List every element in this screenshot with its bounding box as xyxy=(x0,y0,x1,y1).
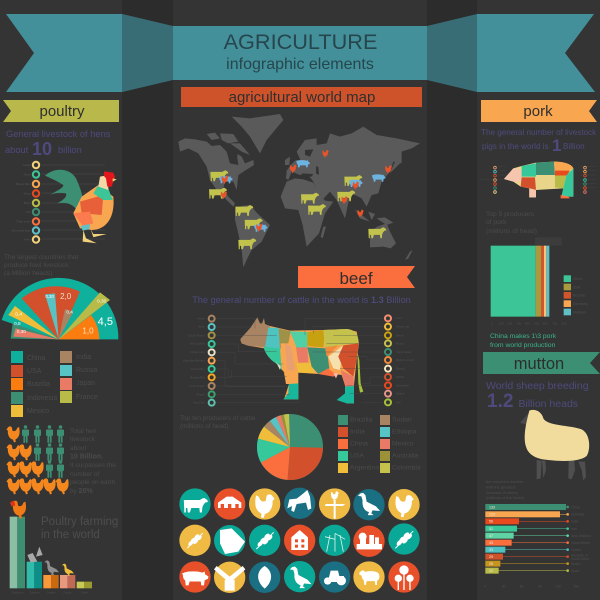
text: pigs number: Billion xyxy=(563,142,585,151)
text: China pork: from world production xyxy=(490,342,556,349)
cow cut diagram: Sirloin xyxy=(396,333,405,337)
text: countries sheep: the countries leaders xyxy=(486,479,523,484)
pork stacked chart: Brazilia xyxy=(573,294,586,298)
text: China pork xyxy=(490,333,557,349)
text: sheep breeding: 1.2 xyxy=(487,391,513,412)
cow cut diagram: Round xyxy=(396,367,405,371)
fan chart: 0,30 xyxy=(97,299,107,304)
heading: mutton xyxy=(483,352,600,374)
cow cut diagram: Hind Tail xyxy=(193,401,205,405)
heading: mutton: mutton xyxy=(514,355,564,373)
mutton bar chart: 29 xyxy=(489,555,493,559)
heading: pork xyxy=(481,100,597,122)
fan chart: 2,0 xyxy=(60,292,72,301)
text: largest countries xyxy=(4,254,79,277)
fan legend: USA xyxy=(27,368,42,375)
pork stacked chart: 600 xyxy=(543,322,548,326)
cow cut diagram: Head xyxy=(198,316,205,320)
fan legend: Brazilia xyxy=(27,381,50,388)
fan legend: China xyxy=(27,355,45,362)
mutton bar chart: 133 xyxy=(489,505,495,509)
fan chart: 0,4 xyxy=(15,312,22,318)
mutton bar chart: Turkey xyxy=(571,548,581,552)
heading: agricultural world map: agricultural world map xyxy=(229,89,375,106)
mutton bar chart: 47 xyxy=(489,534,493,538)
text: total hen livestock: number of xyxy=(70,471,99,478)
fan legend: Russia xyxy=(76,367,98,374)
fan legend: Indonesia xyxy=(27,395,57,402)
text: countries sheep: (millions of the flocks) xyxy=(486,495,525,500)
title ribbon: infographic elements xyxy=(226,56,374,73)
pictogram hens and people xyxy=(6,425,69,494)
mutton bar chart: India xyxy=(571,520,578,524)
heading: pork: pork xyxy=(523,103,553,120)
text: cattle number: The general number of cattle in the world is 1.3 Billion xyxy=(192,295,411,305)
text: poultry farming: Poultry farming xyxy=(41,516,118,528)
cow cut diagram: Rib Cutlets xyxy=(190,342,205,346)
text: hens livestock: about xyxy=(5,145,29,155)
pork stacked chart: 400 xyxy=(525,322,530,326)
cow cut diagram: Rump xyxy=(396,341,404,345)
text: pigs number: pigs in the world is xyxy=(482,142,549,151)
pork stacked chart: Vietnam xyxy=(573,310,586,314)
poultry bar chart: Ducks xyxy=(64,590,72,594)
text: total hen livestock: It surpasses the xyxy=(70,462,116,469)
fan legend: Mexico xyxy=(27,408,49,415)
mutton bar chart: 0 xyxy=(484,584,486,588)
tiny labels: Head xyxy=(23,163,30,167)
poultry bar chart: Other xyxy=(81,590,88,594)
mutton bar chart: 56 xyxy=(489,520,493,524)
mutton bar chart: 60 xyxy=(520,584,524,588)
text: top ten cattle: Top ten producers of cattle xyxy=(180,415,256,422)
mutton bar chart: Australia xyxy=(571,513,584,517)
mutton bar chart: Iran xyxy=(571,527,577,531)
mutton bar chart: 120 xyxy=(555,584,561,588)
cow cut diagram: Neck xyxy=(198,325,205,329)
tiny labels: Back xyxy=(24,201,31,205)
text: top ten cattle xyxy=(180,415,256,430)
cow cut diagram: Ridge Loin xyxy=(190,350,205,354)
cow cut diagram: Shank xyxy=(196,392,205,396)
tiny labels: Feet xyxy=(24,238,30,242)
pork stacked chart: 100 xyxy=(499,322,504,326)
mutton bar chart: China xyxy=(571,505,580,509)
cow cut diagram: Tail xyxy=(396,400,401,404)
pork stacked chart: 0 xyxy=(491,322,493,326)
text: total hen livestock: about xyxy=(70,445,86,452)
heading: poultry xyxy=(3,100,119,122)
text: pigs number: The general number of livestock xyxy=(481,128,597,137)
cow cut diagram: Shank xyxy=(396,392,405,396)
text: total hen livestock: people on earth xyxy=(70,479,116,486)
text: top ten cattle: (millions of head) xyxy=(180,423,229,430)
fan legend xyxy=(11,351,98,417)
pie legend: Sudan xyxy=(392,416,412,424)
text: top 5 pork: of pork xyxy=(486,219,507,226)
text: sheep breeding: Billion heads xyxy=(518,398,578,410)
mutton bar chart xyxy=(484,504,591,588)
mutton bar chart: 25 xyxy=(489,562,493,566)
text: poultry farming xyxy=(41,516,118,541)
text: top 5 pork: Top 5 producers xyxy=(486,211,535,218)
cow cut diagram: Shoulder Brisket xyxy=(183,358,205,362)
pie legend: China xyxy=(350,440,368,448)
mutton bar chart: 30 xyxy=(502,584,506,588)
panel: pork xyxy=(480,100,597,349)
pork stacked chart xyxy=(491,237,588,326)
poultry bar chart: Chickens xyxy=(11,590,24,594)
text: total hen livestock xyxy=(70,428,116,495)
mutton bar chart: Spain xyxy=(571,569,580,573)
pork stacked chart: 500 xyxy=(534,322,539,326)
heading: beef: beef xyxy=(339,269,373,288)
text: top 5 pork xyxy=(486,211,537,235)
mutton bar chart: 52 xyxy=(489,527,493,531)
title ribbon xyxy=(6,14,595,92)
text: top 5 pork: (millions of head) xyxy=(486,228,537,235)
text: sheep breeding xyxy=(486,380,589,412)
sheep illustration xyxy=(520,410,589,481)
text: sheep breeding: World sheep breeding xyxy=(486,380,589,392)
pie chart xyxy=(274,430,306,464)
text: countries sheep xyxy=(486,479,525,500)
text: hens livestock: 10 xyxy=(32,139,52,159)
mutton bar chart: 150 xyxy=(573,584,579,588)
tiny labels: Drumstick legs xyxy=(12,228,31,232)
panel: beef xyxy=(180,266,421,473)
fan chart: 0,30 xyxy=(17,329,26,334)
text: largest countries: (a Million heads) xyxy=(4,270,52,277)
text: largest countries: produce fowl livestock xyxy=(4,262,69,269)
pie legend: Ethiopia xyxy=(392,428,417,436)
pork stacked chart: China xyxy=(573,277,583,281)
text: countries sheep: livestock of sheep xyxy=(486,490,519,495)
mutton bar chart: 22 xyxy=(489,569,493,573)
tiny labels: Breast fillet xyxy=(16,182,30,186)
cow cut diagram: Fore Shank xyxy=(189,384,205,388)
text: poultry farming: in the world xyxy=(41,529,100,541)
poultry bar chart: Turkeys xyxy=(29,590,40,594)
text: countries sheep: with the greatest xyxy=(486,484,516,490)
fan chart: 0,8 xyxy=(14,321,21,326)
pork stacked chart: USA xyxy=(573,285,581,289)
pie legend: Brazilia xyxy=(350,416,373,424)
cow cut diagram xyxy=(183,315,414,406)
panel: mutton xyxy=(483,352,600,588)
title ribbon: AGRICULTURE xyxy=(224,29,377,54)
cow cut diagram: Loin xyxy=(396,316,402,320)
text: total hen livestock: 10 Billion. xyxy=(70,454,103,460)
pie legend: Colombia xyxy=(392,464,421,472)
icon grid xyxy=(179,488,420,593)
mutton bar chart: 33 xyxy=(489,548,493,552)
fan legend: France xyxy=(76,394,98,401)
pork stacked chart: 200 xyxy=(507,322,512,326)
heading: agricultural world map xyxy=(181,87,422,107)
fan chart: 0,30 xyxy=(45,294,54,299)
rooster illustration xyxy=(45,170,117,243)
rooster rings xyxy=(33,162,105,243)
text: China pork: China makes 1\3 pork xyxy=(490,333,557,340)
pork stacked chart: 700 xyxy=(552,322,557,326)
fan chart xyxy=(2,278,118,339)
tiny labels: Wing xyxy=(24,192,30,196)
mutton bar chart: Republic of xyxy=(571,554,588,558)
mutton bar chart: 123 xyxy=(489,513,495,517)
tiny labels: Neck xyxy=(24,172,31,176)
heading: beef xyxy=(298,266,415,288)
mutton bar chart: Sudan xyxy=(571,562,581,566)
text: pigs number: 1 xyxy=(552,136,561,155)
mutton bar chart: New Zealand xyxy=(571,534,591,538)
mutton bar chart: 90 xyxy=(538,584,542,588)
text: total hen livestock: livestock xyxy=(70,436,96,443)
cow cut diagram: Chuck Roast xyxy=(188,333,205,337)
pork stacked chart: 300 xyxy=(516,322,521,326)
pie legend: India xyxy=(350,428,365,436)
pig cut diagram xyxy=(480,162,597,198)
cow cut diagram: Udder xyxy=(396,375,404,379)
mutton bar chart: Great Britain xyxy=(571,541,590,545)
pie legend: Mexico xyxy=(392,440,414,448)
cow cut diagram: Brisket Rib xyxy=(190,375,205,379)
mutton bar chart: South Africa xyxy=(571,557,589,561)
cow cut diagram: Bottom round xyxy=(396,358,414,362)
cow cut diagram: Silverside xyxy=(396,383,409,387)
text: largest countries: The largest countries that xyxy=(4,254,79,261)
pork stacked chart: 800 xyxy=(561,322,567,326)
fan chart: 0,4 xyxy=(66,309,73,314)
world map xyxy=(178,114,420,267)
poultry bar chart xyxy=(10,500,92,594)
fan legend: India xyxy=(76,354,91,361)
text: hens livestock: General livestock of hens xyxy=(6,129,111,139)
heading: poultry: poultry xyxy=(39,103,85,120)
pork stacked chart: Germany xyxy=(573,302,588,306)
fan legend: Japan xyxy=(76,380,95,387)
tiny labels: Tail xyxy=(26,210,30,214)
text: hens livestock: billion xyxy=(58,145,82,155)
cow cut diagram: Sirloin top xyxy=(396,325,410,329)
cow cut diagram: Flank steak xyxy=(396,350,412,354)
fan chart: 4,5 xyxy=(98,316,113,328)
text: total hen livestock: by 20% xyxy=(70,488,93,495)
mutton bar chart: 43 xyxy=(489,541,493,545)
text: hens livestock xyxy=(5,129,111,159)
pie legend xyxy=(338,415,421,473)
pie legend: USA xyxy=(350,452,364,460)
tiny labels xyxy=(12,163,31,242)
fan chart: 1,0 xyxy=(82,327,94,336)
tiny labels: Thigh meat xyxy=(16,220,30,224)
panel: poultry xyxy=(2,100,119,594)
pie legend: Argentina xyxy=(350,464,379,472)
text: pigs number xyxy=(481,128,597,155)
text: total hen livestock: Total hen xyxy=(70,428,97,435)
cow cut diagram: Short Ribs xyxy=(191,367,205,371)
poultry bar chart: Geese xyxy=(47,590,56,594)
pie legend: Australia xyxy=(392,452,419,460)
